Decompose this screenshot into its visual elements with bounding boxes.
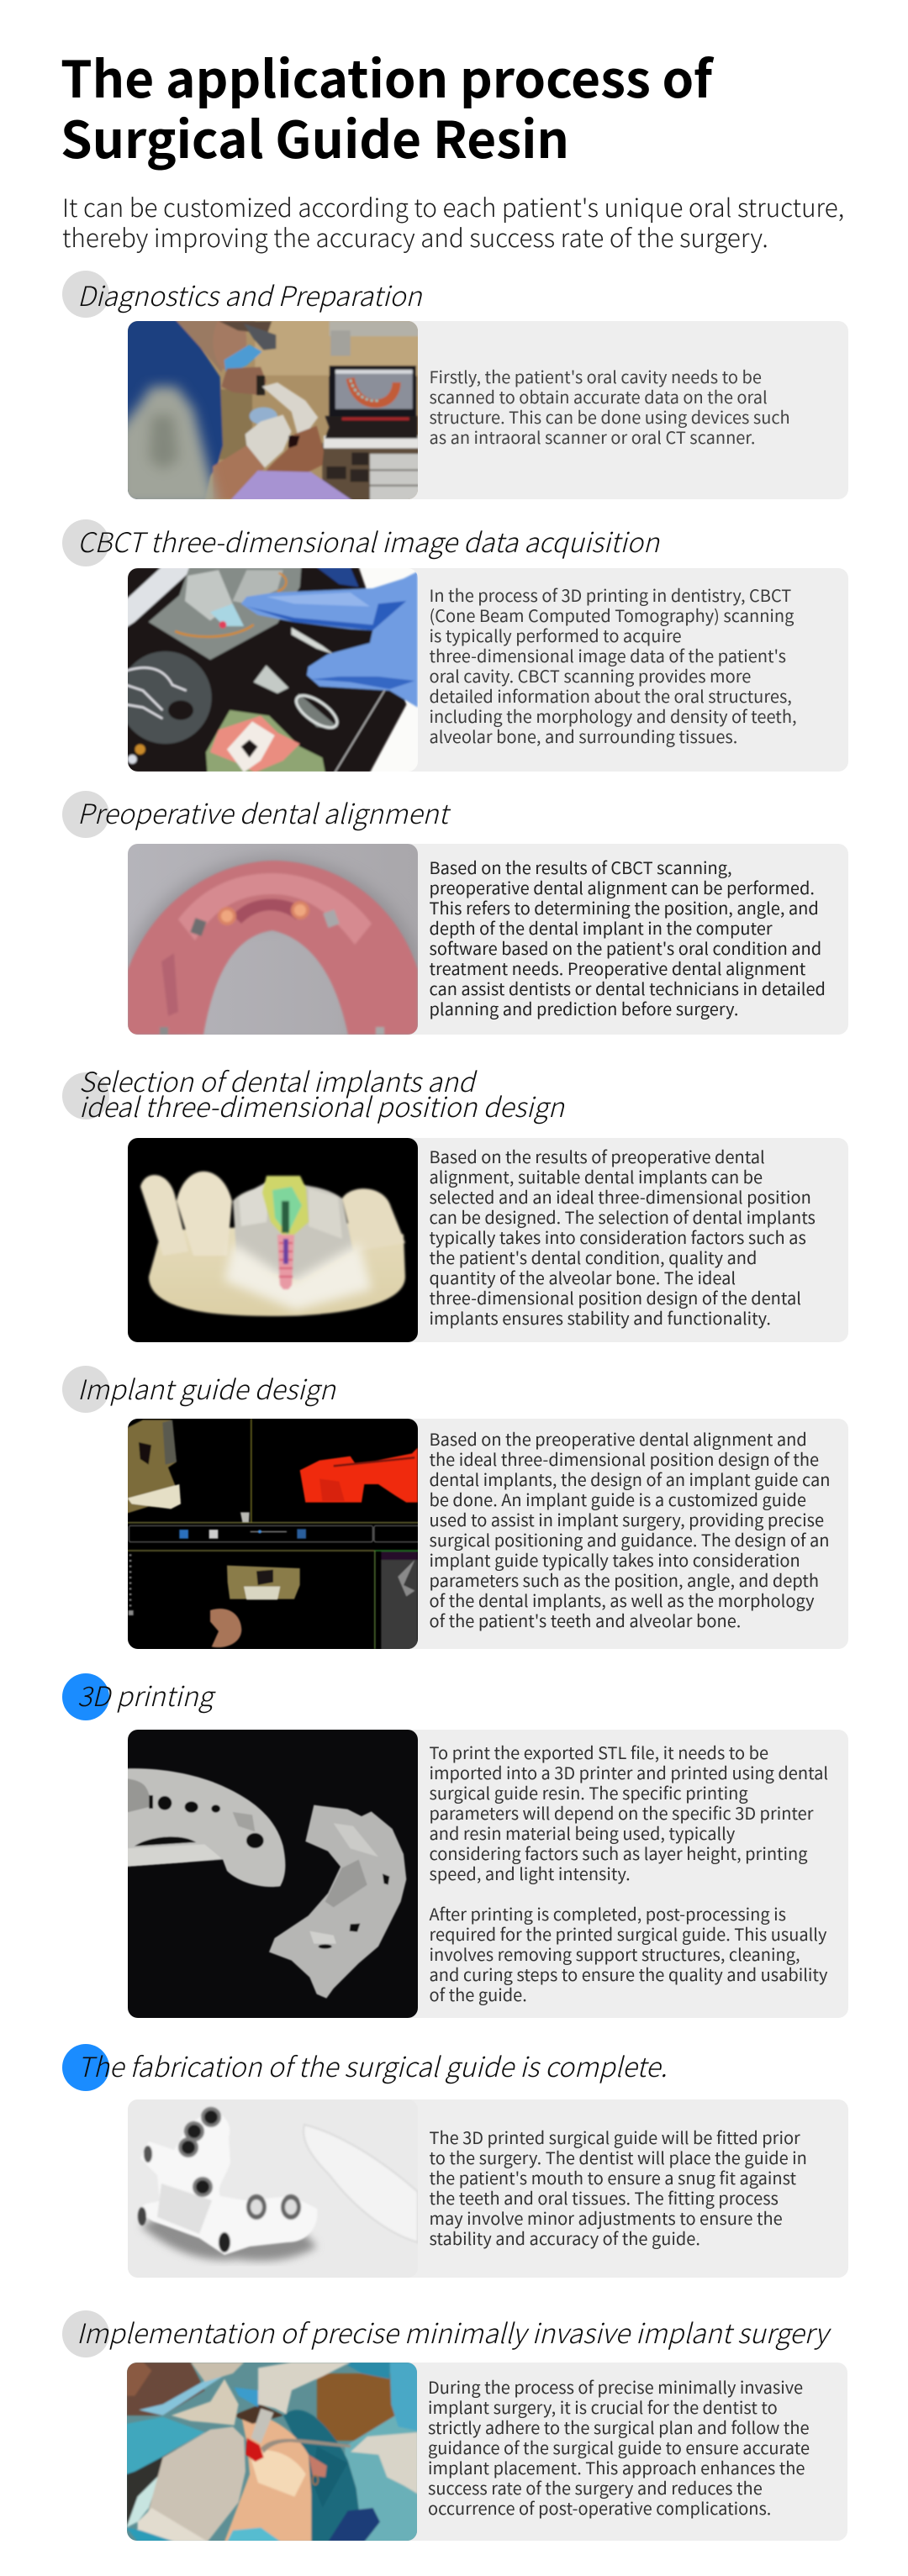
photo: finished surgical guides with metal sleeves bbox=[136, 2105, 418, 2266]
step text: alignment, suitable dental implants can be bbox=[429, 1164, 763, 1188]
heading: Selection of dental implants and ideal three-dimensional position design bbox=[62, 1061, 565, 1125]
step text: is typically performed to acquire bbox=[429, 623, 682, 647]
step text bbox=[429, 364, 790, 449]
heading: Implant guide design bbox=[62, 1366, 336, 1413]
step text: printing parameters and post-processing: parameters will depend on the specific 3D printer bbox=[429, 1800, 814, 1825]
step text: printing parameters and post-processing: involves removing support structures, cleaning, bbox=[429, 1941, 800, 1966]
step text: implant guide typically takes into consideration bbox=[429, 1547, 800, 1572]
heading text: ideal three-dimensional position design bbox=[79, 1087, 564, 1125]
step text: strictly adhere to the surgical plan and follow the bbox=[428, 2415, 810, 2439]
badge: blue circle bbox=[62, 1673, 109, 1720]
step text: the patient's mouth to ensure a snug fit against bbox=[429, 2165, 796, 2189]
step text: printing parameters and post-processing: speed, and light intensity. bbox=[429, 1861, 631, 1885]
step text: typically takes into consideration factors such as bbox=[429, 1225, 806, 1249]
panel: Selection of dental implants bbox=[128, 1138, 848, 1342]
step text bbox=[429, 582, 797, 748]
heading text: Preoperative dental alignment bbox=[77, 793, 448, 832]
step text: guidance of the surgical guide to ensure accurate bbox=[428, 2435, 810, 2459]
step text: alveolar bone, and surrounding tissues. bbox=[429, 724, 737, 748]
badge: grey circle bbox=[62, 271, 109, 318]
step text: three-dimensional position design of the dental bbox=[429, 1285, 801, 1309]
heading text bbox=[79, 1061, 565, 1125]
heading: Preoperative dental alignment bbox=[62, 791, 451, 838]
step text: success rate of the surgery and reduces the bbox=[428, 2475, 763, 2500]
step text: can be designed. The selection of dental implants bbox=[429, 1204, 816, 1229]
panel: CBCT bbox=[128, 568, 848, 772]
step text: printing parameters and post-processing: surgical guide resin. The specific printing bbox=[429, 1780, 748, 1804]
badge: grey circle bbox=[62, 1072, 109, 1119]
step text: printing parameters and post-processing: considering factors such as layer height, printing bbox=[429, 1841, 808, 1865]
panel: Preoperative dental alignment bbox=[128, 844, 848, 1035]
step text: may involve minor adjustments to ensure the bbox=[429, 2205, 783, 2230]
heading: The fabrication of the surgical guide is complete. bbox=[62, 2044, 668, 2091]
badge: grey circle bbox=[62, 1366, 109, 1413]
step text: be done. An implant guide is a customized guide bbox=[429, 1487, 806, 1511]
heading: Diagnostics and Preparation bbox=[62, 271, 422, 318]
heading text: Diagnostics and Preparation bbox=[77, 276, 422, 314]
photo: dentist scanning patient with intraoral scanner bbox=[128, 321, 418, 499]
render: tooth model with implant bbox=[128, 1138, 418, 1342]
step text bbox=[429, 2125, 807, 2250]
step text: preoperative dental alignment can be performed. bbox=[429, 875, 815, 899]
photo: pink denture model with implants bbox=[128, 844, 418, 1035]
screenshot: implant planning software bbox=[128, 1419, 418, 1649]
photo: surgeons operating on patient bbox=[127, 2363, 417, 2541]
step text: surgical positioning and guidance. The design of an bbox=[429, 1527, 829, 1551]
step text: During the process of precise minimally invasive bbox=[428, 2374, 803, 2399]
step text: implant surgery, it is crucial for the dentist to bbox=[428, 2394, 778, 2419]
heading text: Selection of dental implants and bbox=[79, 1061, 474, 1100]
step text: can assist dentists or dental technicians in detailed bbox=[429, 976, 826, 1000]
panel: minimally invasive implant surgery bbox=[126, 2363, 847, 2541]
badge: blue circle bbox=[62, 2044, 109, 2091]
step text bbox=[429, 855, 826, 1020]
heading: 3D printing bbox=[62, 1673, 216, 1720]
step text: printing parameters and post-processing: To print the exported STL file, it needs to be bbox=[429, 1740, 768, 1764]
step text: printing parameters and post-processing bbox=[429, 1740, 828, 2006]
heading text: The fabrication of the surgical guide is complete. bbox=[77, 2047, 668, 2085]
step text: quantity of the alveolar bone. The ideal bbox=[429, 1265, 736, 1289]
heading text: Implant guide design bbox=[77, 1369, 335, 1408]
panel: Implant guide design bbox=[128, 1419, 848, 1649]
panel: 3D printing bbox=[128, 1730, 848, 2018]
step text: the teeth and oral tissues. The fitting process bbox=[429, 2185, 779, 2210]
step text: detailed information about the oral structures, bbox=[429, 683, 792, 708]
step text bbox=[429, 1426, 830, 1632]
step text: oral cavity. CBCT scanning provides more bbox=[429, 663, 751, 687]
title bbox=[61, 40, 715, 173]
photo: printed translucent surgical guides on black bbox=[128, 1730, 418, 2018]
step text: implants ensures stability and functionality. bbox=[429, 1305, 771, 1330]
step text: of the dental implants, as well as the morphology bbox=[429, 1588, 814, 1612]
step text: to the surgery. The dentist will place the guide in bbox=[429, 2145, 807, 2169]
step text bbox=[429, 1144, 816, 1330]
step text: parameters such as the position, angle, and depth bbox=[429, 1567, 819, 1592]
step text: printing parameters and post-processing: of the guide. bbox=[429, 1982, 527, 2006]
step text: depth of the dental implant in the computer bbox=[429, 915, 773, 940]
step text: Based on the preoperative dental alignment and bbox=[429, 1426, 807, 1451]
step text: printing parameters and post-processing: After printing is completed, post-processing is bbox=[429, 1901, 786, 1925]
step text: dental implants, the design of an implant guide can bbox=[429, 1467, 830, 1491]
subtitle bbox=[62, 188, 844, 254]
step text bbox=[428, 2374, 810, 2520]
step text: software based on the patient's oral condition and bbox=[429, 935, 821, 960]
panel: fabrication complete bbox=[128, 2099, 848, 2278]
step text: three-dimensional image data of the patient's bbox=[429, 643, 786, 667]
heading: CBCT three-dimensional image data acquisition bbox=[62, 519, 659, 566]
step text: stability and accuracy of the guide. bbox=[429, 2226, 700, 2250]
step text: Firstly, the patient's oral cavity needs to be bbox=[429, 364, 762, 388]
step text: selected and an ideal three-dimensional position bbox=[429, 1184, 811, 1209]
step text: The 3D printed surgical guide will be fitted prior bbox=[429, 2125, 800, 2149]
step text: structure. This can be done using devices such bbox=[429, 404, 790, 429]
badge: grey circle bbox=[62, 519, 109, 566]
step text: In the process of 3D printing in dentistry, CBCT bbox=[429, 582, 791, 607]
step text: printing parameters and post-processing: required for the printed surgical guide. This usually bbox=[429, 1921, 826, 1946]
step text: Based on the results of CBCT scanning, bbox=[429, 855, 732, 879]
heading text: Implementation of precise minimally invasive implant surgery bbox=[77, 2313, 828, 2352]
step text: including the morphology and density of teeth, bbox=[429, 703, 797, 728]
step text: printing parameters and post-processing: imported into a 3D printer and printed using dental bbox=[429, 1760, 828, 1784]
subtitle: It can be customized according to each patient's unique oral structure, bbox=[62, 188, 844, 224]
step text: planning and prediction before surgery. bbox=[429, 996, 738, 1020]
step text: (Cone Beam Computed Tomography) scanning bbox=[429, 603, 794, 627]
step text: printing parameters and post-processing: and resin material being used, typically bbox=[429, 1820, 735, 1845]
badge: grey circle bbox=[62, 791, 109, 838]
photo: gloved hand pointing at CBCT images on tablet bbox=[128, 568, 418, 772]
heading text: 3D printing bbox=[77, 1676, 213, 1715]
heading: Implementation of precise minimally invasive implant surgery bbox=[62, 2310, 831, 2357]
step text: of the patient's teeth and alveolar bone. bbox=[429, 1608, 741, 1632]
step text: scanned to obtain accurate data on the oral bbox=[429, 384, 768, 408]
step text: This refers to determining the position, angle, and bbox=[429, 895, 819, 919]
step text: Based on the results of preoperative dental bbox=[429, 1144, 765, 1168]
panel: Diagnostics and Preparation bbox=[128, 321, 848, 499]
title: The application process of bbox=[61, 40, 712, 113]
heading text: CBCT three-dimensional image data acquisition bbox=[77, 522, 659, 561]
subtitle: thereby improving the accuracy and success rate of the surgery. bbox=[62, 219, 768, 254]
step text: the ideal three-dimensional position design of the bbox=[429, 1446, 819, 1471]
step text: the patient's dental condition, quality and bbox=[429, 1245, 757, 1269]
step text: implant placement. This approach enhances the bbox=[428, 2455, 805, 2479]
step text: treatment needs. Preoperative dental alignment bbox=[429, 956, 805, 980]
step text: used to assist in implant surgery, providing precise bbox=[429, 1507, 824, 1531]
title: Surgical Guide Resin bbox=[61, 100, 569, 173]
step text: printing parameters and post-processing: and curing steps to ensure the quality and usability bbox=[429, 1962, 827, 1986]
step text: occurrence of post-operative complications. bbox=[428, 2495, 771, 2520]
step text: as an intraoral scanner or oral CT scanner. bbox=[429, 424, 755, 449]
badge: grey circle bbox=[62, 2310, 109, 2357]
